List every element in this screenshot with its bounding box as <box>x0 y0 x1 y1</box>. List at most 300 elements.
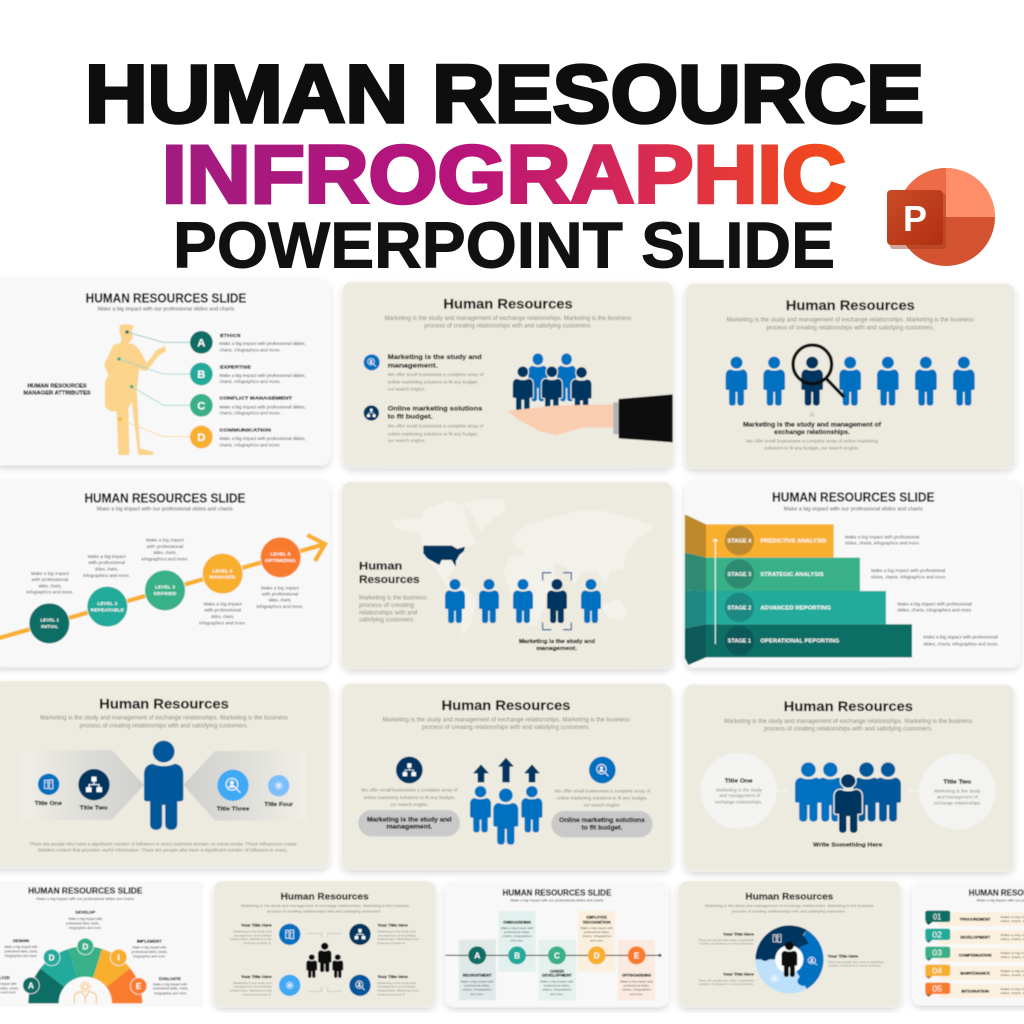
label: develop: DEVELOP <box>75 910 96 915</box>
text block with icon: study and management: online marketing solutions to fit any budget, <box>388 380 478 385</box>
level 4: slides, charts, <box>211 614 234 619</box>
heading and description: Marketing is the business <box>359 595 427 601</box>
label: develop: infographics and more. <box>69 926 102 930</box>
row 04: 04 <box>932 966 942 975</box>
right block: online marketing solutions to fit any budget, <box>557 796 647 801</box>
text block with icon: online marketing <box>364 405 484 443</box>
timeline nodes: D <box>594 951 600 960</box>
slide subtitle <box>383 717 630 731</box>
stage: recruitment: professional slides, <box>464 984 490 988</box>
stage: recruitment: Make a big impact with <box>461 980 494 984</box>
label: design: DESIGN <box>13 938 29 943</box>
level 1: LEVEL 1 <box>40 617 59 622</box>
level 3: with professional <box>147 544 183 549</box>
slide subtitle: process of creating relationships with and satisfying customers. <box>422 725 590 731</box>
stage: recruitment: and more. <box>471 992 484 996</box>
text: top right: Your Title Here <box>377 923 409 928</box>
circle: title two <box>919 754 995 830</box>
arrow: timeline <box>446 953 662 957</box>
row 01: 01 <box>933 912 942 921</box>
slide subtitle: Marketing is the study and management of exchange relationships. Marketing is the business <box>383 717 630 723</box>
item D: communication: Make a big impact with professional slides, <box>219 436 306 441</box>
slide heading: HUMAN RESOURCES SLIDE <box>28 885 143 895</box>
item A: ethics <box>190 331 306 354</box>
side wall <box>685 514 706 665</box>
row 02: DEVELOPMENT <box>960 936 991 940</box>
text block <box>743 423 881 451</box>
slide subtitle: process of creating relationships with and satisfying customers. <box>766 325 935 331</box>
right block: Online marketing solutions <box>559 817 645 824</box>
panel: four titles around people <box>213 881 436 1007</box>
text: right <box>828 954 884 968</box>
puzzle circle <box>755 925 824 994</box>
side label: MANAGER ATTRIBUTES <box>23 390 91 396</box>
badge letters: E <box>136 981 142 991</box>
slide subtitle: Make a big impact with our professional slides and charts. <box>97 507 234 513</box>
text: top left: Marketing is the study and <box>233 930 272 934</box>
right chevron band <box>183 751 306 821</box>
left block: Marketing is the study and <box>367 816 452 823</box>
panel: numbered list <box>912 881 1024 1005</box>
corner brackets <box>307 933 342 991</box>
icon: PowerPoint logo <box>887 168 995 266</box>
level 5 <box>256 537 303 609</box>
slide heading: Human Resources <box>281 891 369 901</box>
stage 3 <box>706 558 947 591</box>
row of people <box>445 579 601 623</box>
slide subtitle: Marketing is the study and management of exchange relationships. Marketing is the business <box>40 716 288 722</box>
stage: employee recognition <box>580 915 613 942</box>
level 4: infographics and more. <box>199 620 246 625</box>
stage: onboarding: professional slides, <box>504 930 530 934</box>
slide subtitle: Marketing is the study and management of exchange relationships. Marketing is the business <box>385 316 631 322</box>
row 04: MAINTENANCE <box>960 972 991 976</box>
stage: employee recognition: Make a big impact with <box>580 926 613 930</box>
stage 1: OPERATIONAL PEPORTING <box>760 639 839 645</box>
circle: title one: Marketing is the study <box>716 788 763 793</box>
text: bottom left: business process of. <box>243 992 272 996</box>
badge letters: I <box>118 952 120 962</box>
label: implement <box>131 939 167 958</box>
level 3 <box>141 538 188 611</box>
text: bottom left: number of followers in every business. <box>699 982 754 986</box>
row 05: 05 <box>932 984 942 993</box>
level 1: Make a big impact <box>31 571 70 576</box>
right block: We offer small businesses a complete array of <box>554 789 651 794</box>
left block <box>358 757 460 836</box>
level 3: Make a big impact <box>146 538 185 543</box>
text: bottom left: Your Title Here <box>723 972 755 977</box>
label: evaluate: EVALUATE <box>159 976 181 981</box>
stage: employee recognition: RECOGNITION <box>583 920 611 925</box>
stage: offboarding: and more. <box>630 992 643 996</box>
level 3: LEVEL 3 <box>155 584 175 589</box>
stage: onboarding: charts, infographics <box>503 934 532 938</box>
title one: Title One <box>35 801 62 807</box>
text block with icon: study and management: management. <box>388 362 438 369</box>
stage: recruitment: charts, infographics <box>463 988 492 992</box>
level 4: LEVEL 4 <box>212 568 233 573</box>
label: design: Make a big impact with <box>4 945 38 949</box>
level 5: infographics and more. <box>256 604 303 609</box>
slide subtitle <box>40 716 288 729</box>
arrow: rising path <box>0 535 325 638</box>
level 2: slides, charts, <box>95 566 118 571</box>
slide subtitle <box>724 719 973 733</box>
slide heading: Human Resources <box>99 695 229 711</box>
item C: conflict management: C <box>197 400 205 412</box>
row 04 <box>925 965 1024 980</box>
text: top left: management of exchange <box>233 933 272 937</box>
label: implement: IMPLEMENT <box>137 939 162 944</box>
slide heading: HUMAN RESOURCES SLIDE <box>86 290 246 305</box>
heading and description: relationships with and <box>359 610 417 616</box>
stage 2 <box>706 591 972 624</box>
stage 2: Make a big impact with professional <box>897 601 972 606</box>
circle: title two: exchange relationships. <box>934 800 981 805</box>
panel: team with two titles <box>684 684 1014 871</box>
panel: people with up arrows <box>342 683 672 869</box>
illustration: people group <box>512 353 592 414</box>
label: design: infographics and more. <box>4 954 38 958</box>
label: design: professional slides, charts, <box>4 949 38 953</box>
stage: onboarding: Make a big impact with <box>501 926 534 930</box>
level 5: with professional <box>262 591 298 596</box>
level 2: LEVEL 2 <box>97 601 118 606</box>
text: bottom left: Your Title Here <box>241 974 273 979</box>
stage 1: Make a big impact with professional <box>923 635 998 640</box>
text: top left <box>230 923 273 945</box>
label: design <box>4 938 38 958</box>
slide subtitle: Make a big impact with our professional slides and charts <box>36 897 134 901</box>
text: top left: relationships. Marketing is the <box>230 937 272 941</box>
illustration: open hand and sleeve <box>507 394 673 442</box>
slide subtitle: process of creating relationships with and satisfying customers. <box>732 909 846 913</box>
level 1: slides, charts, <box>38 583 62 588</box>
text: bottom right <box>377 974 419 996</box>
stage: onboarding <box>501 920 534 942</box>
stage 4: Make a big impact with professional <box>845 535 919 540</box>
stage: career development: CAREER <box>550 969 564 974</box>
row 01 <box>925 911 1024 926</box>
slide subtitle <box>385 316 631 329</box>
timeline nodes: E <box>634 951 640 960</box>
right block: our search engine. <box>583 803 621 808</box>
level 4: Make a big impact <box>204 602 243 607</box>
title two <box>78 769 110 812</box>
level 2: Make a big impact <box>88 554 127 559</box>
stage 4 <box>706 524 920 558</box>
left block: online marketing solutions to fit any budget, <box>363 795 455 800</box>
timeline nodes <box>468 946 646 964</box>
label: evaluate: Make a big impact with <box>153 982 187 986</box>
title: main heading <box>85 49 924 282</box>
background boxes <box>459 911 655 1000</box>
slide subtitle: Marketing is the study and management of exchange relationships. Marketing is the business <box>724 719 973 725</box>
label: evaluate: professional slides, charts, <box>153 987 188 991</box>
slide subtitle: Make a big impact with our professional slides and charts <box>98 307 235 313</box>
item B: expertise <box>190 363 306 385</box>
circle: title one: and management of <box>719 793 761 798</box>
stage 3: STRATEGIC ANALYSIS <box>760 572 824 578</box>
title three <box>217 770 249 812</box>
slide heading: Human Resources <box>745 892 834 902</box>
black people <box>306 943 343 978</box>
text block with icon: online marketing: Online marketing solutions <box>388 406 483 413</box>
pointer triangle <box>809 411 815 417</box>
arrow: upward <box>712 538 719 644</box>
label: develop <box>66 910 102 930</box>
item B: expertise: charts, infographics and more. <box>219 379 281 384</box>
row 03: COMPENSATION <box>959 954 992 958</box>
slide subtitle: Marketing is the study and management of exchange relationships. Marketing is the business <box>241 903 409 908</box>
side label <box>23 384 91 396</box>
title four <box>264 775 294 808</box>
row 01: PROCUREMENT <box>960 918 991 922</box>
text block with icon: online marketing: to fit budget. <box>388 414 433 421</box>
text block with icon: study and management: Marketing is the study and <box>388 354 482 361</box>
focus brackets <box>543 573 571 630</box>
circle: title two: and management of <box>937 794 979 799</box>
slide subtitle <box>705 903 874 913</box>
stage: offboarding <box>620 973 653 996</box>
text: bottom left: Marketing is the study and <box>233 981 272 985</box>
panel: maturity levels arrow <box>0 479 329 667</box>
panel: people on hand <box>343 282 673 467</box>
text: bottom left: relationships. Marketing is the <box>230 988 272 992</box>
stage: career development: Make a big impact with <box>541 980 574 984</box>
puzzle icons <box>771 934 817 982</box>
slide subtitle: process of creating relationships with and satisfying customers. <box>79 723 249 729</box>
level 1: infographics and more. <box>26 590 73 595</box>
panel: timeline stages <box>446 881 668 1007</box>
row 02: 02 <box>932 930 942 939</box>
text: bottom left <box>698 972 755 986</box>
people group <box>470 786 542 845</box>
label: evaluate: infographics and more. <box>154 991 187 995</box>
text block: exchange relationships. <box>774 430 850 436</box>
slide subtitle: Marketing is the study and management of exchange relationships. Marketing is the business <box>705 903 874 908</box>
text block: We offer small businesses a complete array of online marketing <box>746 439 878 444</box>
circle: title two: Marketing is the study <box>934 789 981 794</box>
stage: offboarding: Make a big impact with <box>620 980 653 984</box>
text: right: number of followers in every business. <box>828 964 882 968</box>
text: top right: business process of. <box>377 941 406 945</box>
heading line: HUMAN RESOURCE: HUMAN RESOURCE <box>85 49 924 140</box>
stage 4: slides, charts, infographics and more. <box>845 541 920 546</box>
label: implement: infographics and more. <box>133 954 166 958</box>
item D: communication: COMMUNICATION <box>219 427 271 433</box>
title two: Title Two <box>80 806 108 812</box>
text: top left: Your Title Here <box>723 932 755 937</box>
panel: stages staircase <box>685 479 1020 667</box>
level 1: INITIAL <box>41 624 58 629</box>
panel: central person with chevrons <box>0 681 329 868</box>
slide heading: HUMAN RESOURCES SLIDE <box>772 490 935 505</box>
text: top right: relationships. Marketing is the <box>377 937 419 941</box>
caption: Marketing is the study and <box>519 639 595 645</box>
timeline nodes: C <box>554 951 560 960</box>
stage 2: ADVANCED REPORTING <box>760 605 831 611</box>
row 02 <box>925 929 1024 944</box>
item D: communication <box>190 426 306 448</box>
heading and description: satisfying customers. <box>359 618 415 624</box>
text block with icon: study and management <box>364 354 484 391</box>
circle: title one: Title One <box>725 778 753 784</box>
text: top left: number of followers in every business. <box>699 942 754 946</box>
heading line: POWERPOINT SLIDE: POWERPOINT SLIDE <box>173 210 835 282</box>
row of people <box>726 357 975 406</box>
label: evaluate <box>153 976 188 995</box>
slide heading: Human Resources <box>786 297 915 313</box>
item C: conflict management: CONFLICT MANAGEMENT <box>219 396 292 402</box>
text: right: Your Title Here <box>828 954 859 959</box>
text block with icon: online marketing: our search engine. <box>388 438 426 443</box>
caption: management. <box>536 646 578 652</box>
level 2: infographics and more. <box>83 573 130 578</box>
panel: world map people <box>342 482 673 668</box>
slide heading: Human Resources <box>784 698 913 714</box>
slide heading: HUMAN RESOURCES SLIDE <box>84 490 246 505</box>
level 3: infographics and more. <box>141 557 188 562</box>
icon: manager with gear <box>74 982 96 1003</box>
text: bottom right: Marketing is the study and <box>377 981 416 985</box>
stage: employee recognition: and more. <box>590 939 604 942</box>
team illustration <box>795 762 901 833</box>
item C: conflict management <box>190 394 306 417</box>
level 2: with professional <box>88 560 125 565</box>
map highlight: USA <box>423 546 465 567</box>
stage 3: Make a big impact with professional <box>871 568 945 573</box>
timeline nodes: A <box>474 951 480 960</box>
item A: ethics: Make a big impact with professional slides, <box>219 341 306 346</box>
level 1 <box>26 571 73 644</box>
stage 2: STAGE 2 <box>727 605 751 611</box>
item C: conflict management: Make a big impact with professional slides, <box>219 404 306 409</box>
panel: manager attributes <box>0 278 330 465</box>
badge letters: A <box>28 980 34 990</box>
icon circles <box>279 924 371 996</box>
stage: career development <box>541 969 574 996</box>
label: develop: Make a big impact with <box>68 917 102 921</box>
left block: management. <box>386 824 433 831</box>
item B: expertise: Make a big impact with professional slides, <box>219 373 306 378</box>
text: bottom left: management of exchange <box>233 985 272 989</box>
item A: ethics: A <box>197 337 205 349</box>
text: right: There are people who have a significant <box>828 960 884 964</box>
item B: expertise: EXPERTISE <box>220 364 252 370</box>
slide heading: Human Resources <box>443 295 573 311</box>
left chevron band <box>21 750 144 820</box>
slide subtitle: process of creating relationships with and satisfying customers. <box>424 323 592 329</box>
right block: to fit budget. <box>581 825 623 832</box>
item D: communication: D <box>197 432 205 444</box>
right block <box>551 757 653 837</box>
text block: solutions to fit any budget, our search engine. <box>764 446 859 451</box>
text block: Marketing is the study and management of <box>743 423 881 429</box>
text: top left: business process of. <box>243 941 272 945</box>
text: bottom left: There are people who have a significant <box>698 979 754 982</box>
slide heading: Human Resources <box>441 697 571 713</box>
level 1: with professional <box>32 577 68 582</box>
stage: recruitment <box>461 973 494 996</box>
circle: title one <box>701 753 777 829</box>
footer text <box>29 841 297 853</box>
item D: communication: charts, infographics and more. <box>219 442 281 447</box>
text block with icon: study and management: our search engine. <box>388 386 426 391</box>
stage: onboarding: and more. <box>510 939 524 942</box>
slide subtitle: Marketing is the study and management of exchange relationships. Marketing is the business <box>727 318 974 324</box>
level 5: slides, charts, <box>268 598 292 603</box>
panel: arc stages <box>0 882 203 1007</box>
stage 3: STAGE 3 <box>727 572 751 578</box>
text block with icon: online marketing: online marketing solutions to fit any budget, <box>388 431 478 436</box>
heading and description <box>359 560 427 624</box>
text: bottom right: business process of. <box>377 992 406 996</box>
item A: ethics: ETHICS <box>220 333 241 339</box>
text block with icon: online marketing: We offer small businesses a complete array of <box>388 424 484 429</box>
item B: expertise: B <box>197 369 205 381</box>
stage 4: STAGE 4 <box>727 539 751 545</box>
central person <box>144 741 183 830</box>
level 4: MANAGED <box>209 574 236 579</box>
row 03 <box>925 947 1024 962</box>
heading and description: Resources <box>359 574 420 586</box>
arc segments <box>28 946 142 1003</box>
caption: Write Something Here <box>813 843 882 849</box>
connector lines <box>117 330 190 437</box>
stage 4: PREDICTIVE ANALYSIS <box>760 539 827 545</box>
stage: offboarding: professional slides, <box>624 984 650 988</box>
stage: career development: and more. <box>550 992 564 996</box>
text: bottom right: Your Title Here <box>377 974 409 979</box>
label: analyze <box>0 975 19 995</box>
text: top left: Your Title Here <box>241 923 273 928</box>
stage: career development: DEVELOPMENT <box>542 973 572 978</box>
stage 1: STAGE 1 <box>728 639 751 645</box>
row 05: INTEGRATION <box>961 990 989 994</box>
title three: Title Three <box>217 806 249 812</box>
text: top right: management of exchange <box>377 933 416 937</box>
text: top right <box>377 923 419 945</box>
circle: title one: exchange relationships. <box>715 799 762 804</box>
circle: title two: Title Two <box>943 780 972 786</box>
slide heading: HUMAN RESOURCES SLIDE <box>503 888 612 898</box>
stage: onboarding: ONBOARDING <box>503 920 531 924</box>
stage: offboarding: charts, infographics <box>622 988 652 992</box>
text: bottom right: relationships. Marketing is the <box>377 988 419 992</box>
icon: PowerPoint logo: P <box>903 198 927 239</box>
title four: Title Four <box>264 802 294 808</box>
title one <box>35 774 62 807</box>
black person <box>781 942 797 977</box>
figure: manager silhouette with bag <box>104 324 166 455</box>
level 2: REPEATABLE <box>91 607 124 612</box>
level 4: with professional <box>204 608 241 613</box>
left block: our search engine. <box>390 802 428 807</box>
stage: recruitment: RECRUITMENT <box>463 973 492 978</box>
row 03: 03 <box>932 948 942 957</box>
level 3: DEFINED <box>154 591 177 596</box>
stage: employee recognition: professional slides, <box>584 930 610 934</box>
level 5: LEVEL 5 <box>270 552 291 557</box>
panel: puzzle circle <box>678 881 901 1007</box>
text: bottom right: management of exchange <box>377 985 416 989</box>
world map <box>392 498 655 637</box>
slide subtitle <box>241 903 409 913</box>
stage: offboarding: OFFBOARDING <box>622 973 651 978</box>
stage: career development: charts, infographics <box>542 988 572 992</box>
